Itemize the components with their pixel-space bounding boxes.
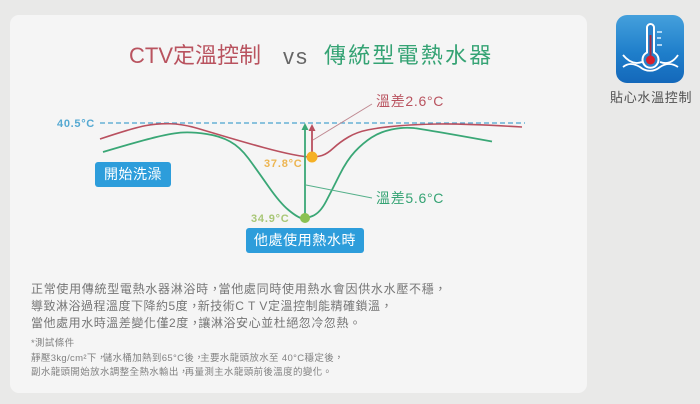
leader line: 5.6°C <box>306 185 372 198</box>
label: temperature difference 5.6°C: 溫差5.6°C <box>376 190 444 206</box>
tag: hot water used elsewhere: 他處使用熱水時 <box>254 232 356 248</box>
title: CTV定溫控制 <box>129 43 261 68</box>
text block: test conditions: 靜壓3kg/cm²下，儲水桶加熱到65°C後，主要水龍頭放水至 40°C穩定後， <box>31 352 344 364</box>
title: vs <box>283 44 309 69</box>
text block: description: 導致淋浴過程溫度下降約5度，新技術C T V定溫控制能精確鎖溫， <box>31 298 393 312</box>
label: 37.8°C: 37.8°C <box>264 158 303 170</box>
title <box>129 43 493 69</box>
curve: traditional heater <box>103 128 492 218</box>
text block: description: 正常使用傳統型電熱水器淋浴時，當他處同時使用熱水會因供水水壓不穩， <box>31 282 447 296</box>
title: 傳統型電熱水器 <box>324 43 493 68</box>
reference line: 40.5°C: 40.5°C <box>57 118 95 130</box>
icon caption: 貼心水溫控制 <box>610 90 692 105</box>
label: temperature difference 2.6°C: 溫差2.6°C <box>376 93 444 109</box>
text block: test conditions: *測試條件 <box>31 338 74 349</box>
tag: start shower: 開始洗澡 <box>104 166 162 182</box>
tag: hot water used elsewhere <box>246 228 364 252</box>
text block: test conditions <box>31 338 344 378</box>
tag: start shower <box>95 162 171 187</box>
marker: green point <box>300 213 310 223</box>
label: 34.9°C: 34.9°C <box>251 213 290 225</box>
icon: thermometer in water <box>616 15 684 83</box>
marker: orange point <box>306 152 318 162</box>
text block: test conditions: 副水龍頭開始放水調整全熱水輸出，再量測主水龍頭前後溫度的變化。 <box>31 367 332 378</box>
arrow: green temperature gap <box>302 123 308 218</box>
leader line: 2.6°C <box>313 104 372 140</box>
arrow: red temperature gap <box>308 124 316 157</box>
panel: comparison card <box>10 15 587 393</box>
text block: description: 當他處用水時溫差變化僅2度，讓淋浴安心並杜絕忽冷忽熱。 <box>31 316 362 330</box>
text block: description <box>31 282 447 330</box>
curve: CTV constant temperature <box>100 124 522 157</box>
